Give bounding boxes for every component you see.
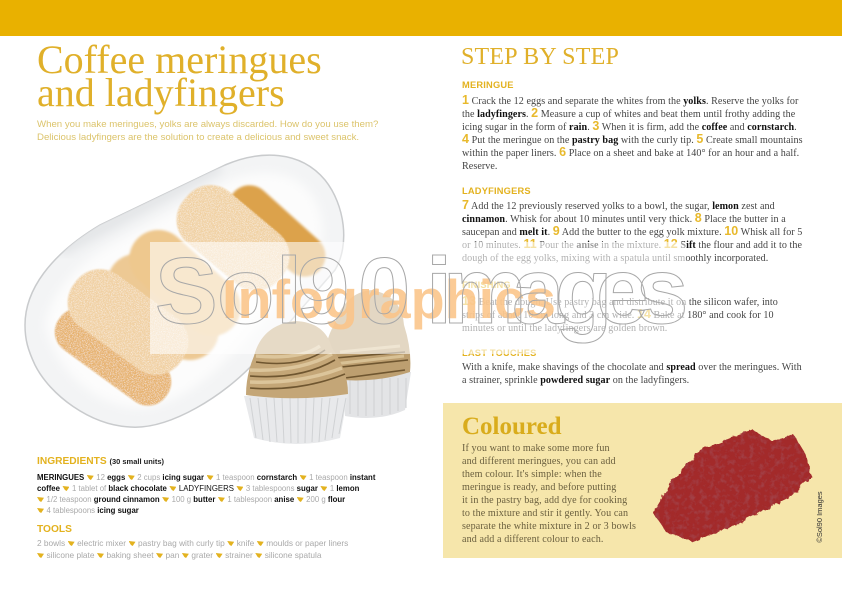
text: meringue steps: within the paper liners. 6 Place on a sheet and bake at 140° for an hour and a half. (462, 145, 799, 159)
text: finishing steps: strips of about 10 cm long and 3 cm wide. 14 Bake at 180° and cook for 10 (462, 307, 774, 321)
heading: tools: TOOLS (37, 524, 72, 535)
text: last touches: With a knife, make shavings of the chocolate and spread over the meringues. With (462, 362, 802, 373)
watermark text: Sol90images (155, 238, 688, 343)
text: tools list (37, 538, 348, 560)
text: last touches (462, 362, 802, 386)
text: meringue steps: icing sugar in the form of rain. 3 When it is firm, add the coffee and cornstarch. (462, 119, 797, 133)
text: meringue steps: 4 Put the meringue on the pastry bag with the curly tip. 5 Create small mountains (462, 132, 803, 146)
text: tools list: 2 bowls electric mixer pastry bag with curly tip knife moulds or paper liners (37, 538, 348, 548)
photo: red powder (653, 429, 812, 542)
text: coloured: separate the white mixture in 2 or 3 bowls (462, 521, 636, 532)
text: meringue steps: the ladyfingers. 2 Measure a cup of whites and beat them until frothy adding the (462, 106, 795, 120)
panel: coloured (443, 403, 842, 558)
text: ladyfingers steps (462, 198, 802, 264)
text: ingredients list: 4 tablespoons icing sugar (46, 506, 139, 515)
intro text (37, 119, 378, 143)
step by step heading: STEP BY STEP (461, 44, 619, 70)
heading: ingredients: INGREDIENTS (30 small units) (37, 456, 164, 467)
text: tools list: silicone plate baking sheet pan grater strainer silicone spatula (46, 550, 321, 560)
top banner (0, 0, 842, 36)
title: Coffee meringues (37, 37, 322, 82)
text: ingredients list (37, 473, 376, 515)
cupcakes (244, 290, 411, 444)
text: coloured (462, 443, 636, 545)
watermark band (150, 242, 686, 354)
text: ingredients list: MERINGUES 12 eggs 2 cups icing sugar 1 teaspoon cornstarch 1 teaspoon instant (37, 473, 375, 482)
text: coloured: and different meringues, you can add (462, 456, 616, 467)
photo credit: ©Sol90 Images (815, 491, 824, 543)
text: finishing steps: minutes or until the ladyfingers are golden brown. (462, 323, 667, 334)
text: ladyfingers steps: cinnamon. Whisk for about 10 minutes until very thick. 8 Place the butter in a (462, 211, 786, 225)
text: ladyfingers steps: or 10 minutes. 11 Pour the anise in the mixture. 12 Sift the flour and add it to the (462, 237, 802, 251)
ladyfingers (46, 173, 334, 414)
heading: coloured: Coloured (462, 413, 562, 440)
text: meringue steps: 1 Crack the 12 eggs and separate the whites from the yolks. Reserve the yolks for (462, 93, 798, 107)
text: last touches: a strainer, sprinkle powdered sugar on the ladyfingers. (462, 375, 689, 386)
text: coloured: and add a different colour to each. (462, 534, 603, 545)
plate (25, 155, 344, 427)
title (37, 37, 322, 115)
text: meringue steps: Reserve. (462, 161, 498, 172)
text: ladyfingers steps: dough of the egg yolks, mixing with a spatula until smoothly incorporated. (462, 253, 768, 264)
text: ladyfingers steps: 7 Add the 12 previously reserved yolks to a bowl, the sugar, lemon zest and (462, 198, 775, 212)
heading: meringue: MERINGUE (462, 80, 514, 90)
text: coloured: meringue is ready, and before putting (462, 482, 616, 493)
text: meringue steps (462, 93, 803, 172)
text: coloured: If you want to make some more fun (462, 443, 610, 454)
text: coloured: to the mixture and stir it gently. You can (462, 508, 628, 519)
text: ladyfingers steps: saucepan and melt it. 9 Add the butter to the egg yolk mixture. 10 Whisk all for 5 (462, 224, 802, 238)
text: finishing steps (462, 294, 778, 334)
text: coloured: it in the pastry bag, add dye for cooking (462, 495, 627, 506)
text: ingredients list: coffee 1 tablet of black chocolate LADYFINGERS 3 tablespoons sugar 1 lemon (37, 484, 359, 493)
heading: finishing: FINISHING (462, 280, 511, 290)
intro text: When you make meringues, yolks are always discarded. How do you use them? (37, 119, 378, 130)
text: finishing steps: 13 Beat the dough. Use pastry bag and distribute it on the silicon wafer, into (462, 294, 778, 308)
photo: ladyfingers on plate and cupcakes (24, 154, 411, 444)
text: ingredients list: 1/2 teaspoon ground cinnamon 100 g butter 1 tablespoon anise 200 g flour (46, 495, 345, 504)
heading: last touches: LAST TOUCHES (462, 348, 537, 358)
intro text: Delicious ladyfingers are the solution to create a delicious and sweet snack. (37, 132, 359, 143)
title: and ladyfingers (37, 70, 285, 115)
text: coloured: them colour. It's simple: when the (462, 469, 602, 480)
watermark text: Infographics (222, 268, 556, 330)
heading: ladyfingers: LADYFINGERS (462, 186, 531, 196)
